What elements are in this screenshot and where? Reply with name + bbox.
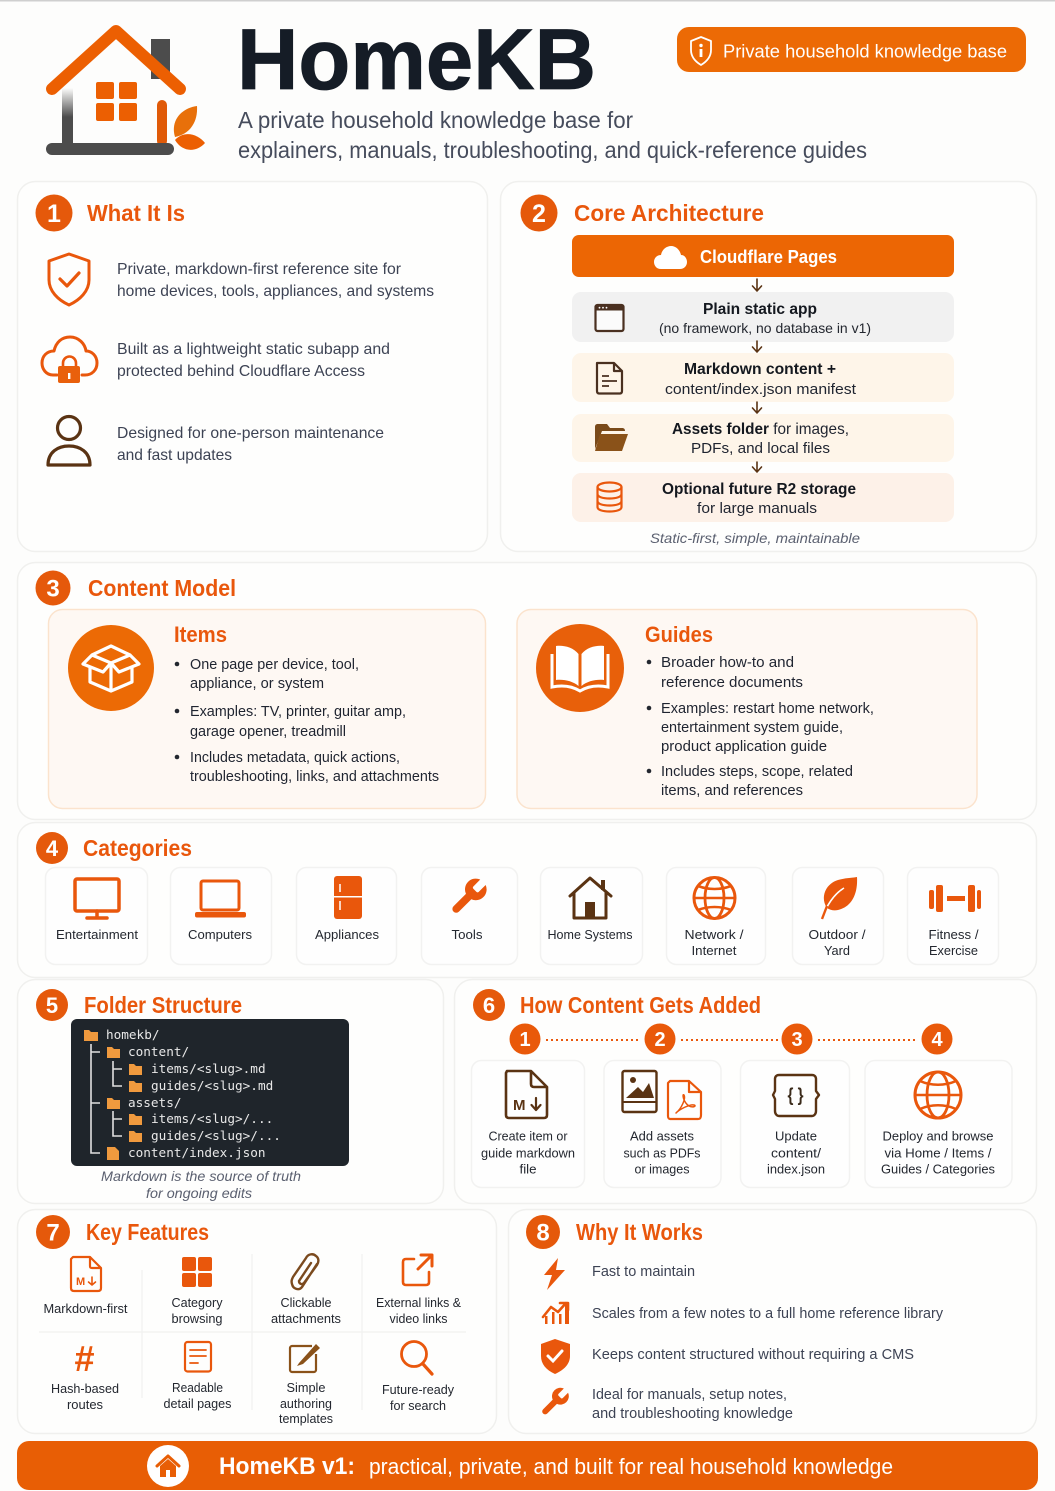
- feature: external links: External links &: [376, 1295, 461, 1310]
- list: items bullets: One page per device, tool,: [190, 656, 359, 673]
- timeline: step numbers: 4: [931, 1029, 943, 1051]
- category: entertainment: [46, 868, 148, 964]
- text: one-person maintenance: and fast updates: [117, 447, 232, 464]
- text: private reference site: home devices, tools, appliances, and systems: [117, 283, 434, 300]
- category: computers: Computers: [188, 927, 253, 942]
- code block: folder tree: items/<slug>/...: [151, 1111, 273, 1126]
- subtitle: [238, 107, 867, 163]
- panel: how content gets added: [454, 980, 1036, 1204]
- code block: folder tree: [71, 1019, 349, 1166]
- feature: simple authoring templates: [279, 1344, 333, 1426]
- panel: content model: [18, 562, 1036, 820]
- reason: fast to maintain: Fast to maintain: [592, 1263, 695, 1280]
- caption: Markdown is the source of truth: [101, 1168, 301, 1184]
- icon: book: [536, 624, 624, 712]
- layer: cloudflare pages: [572, 235, 954, 277]
- panel: what it is: 1: [47, 200, 61, 228]
- reason: fast to maintain: [544, 1258, 695, 1290]
- subtitle: explainers, manuals, troubleshooting, and quick-reference guides: [238, 137, 867, 163]
- step 3: update index json: { }: [788, 1085, 804, 1105]
- step 2: add assets: such as PDFs: [624, 1146, 701, 1160]
- step 2: add assets: [604, 1060, 721, 1188]
- footer banner: [17, 1441, 1038, 1490]
- icon: home: [147, 1445, 189, 1487]
- category: home systems: [540, 868, 642, 964]
- timeline: step numbers: [510, 1024, 952, 1054]
- list: guides bullets: reference documents: [661, 674, 803, 691]
- feature: clickable attachments: Clickable: [280, 1295, 332, 1310]
- list: guides bullets: Includes steps, scope, related: [661, 763, 853, 780]
- list: guides bullets: [647, 654, 874, 799]
- step 3: update index json: content/: [771, 1146, 821, 1160]
- step 4: deploy and browse: Guides / Categories: [881, 1162, 995, 1176]
- feature: future-ready search: for search: [390, 1398, 446, 1413]
- panel: key features: [18, 1210, 496, 1434]
- caption: Static-first, simple, maintainable: [650, 530, 860, 546]
- icon: box: [68, 625, 154, 711]
- icon: cloud lock: [42, 337, 97, 383]
- step 1: create markdown: Create item or: [488, 1128, 568, 1144]
- layer: markdown content: [572, 353, 954, 402]
- feature: hash-based routes: routes: [67, 1397, 103, 1412]
- step 1: create markdown: [472, 1060, 584, 1188]
- footer banner: practical, private, and built for real household knowledge: [369, 1454, 893, 1479]
- layer: markdown content: Markdown content +: [684, 361, 836, 378]
- text: built as subapp: Built as a lightweight static subapp and: [117, 341, 390, 358]
- feature: simple authoring templates: templates: [279, 1411, 333, 1426]
- logo: house icon: [46, 31, 205, 155]
- reason: structured without cms: [541, 1339, 914, 1374]
- layer: cloudflare pages: Cloudflare Pages: [700, 247, 837, 267]
- feature: future-ready search: [382, 1342, 454, 1413]
- panel: folder structure: Folder Structure: [84, 992, 242, 1018]
- layer: markdown content: content/index.json manifest: [665, 381, 857, 398]
- reason: structured without cms: Keeps content structured without requiring a CMS: [592, 1346, 914, 1363]
- feature: readable detail pages: Readable: [172, 1380, 223, 1395]
- list: items bullets: Examples: TV, printer, guitar amp,: [190, 703, 406, 720]
- layer: assets folder: Assets folder for images,: [672, 421, 849, 438]
- step 4: deploy and browse: Deploy and browse: [882, 1128, 994, 1144]
- code block: folder tree: assets/: [128, 1095, 181, 1110]
- list: guides bullets: product application guide: [661, 738, 827, 755]
- feature: hash-based routes: #: [74, 1338, 95, 1379]
- layer: plain static app: Plain static app: [703, 301, 817, 318]
- footer banner: HomeKB v1:: [219, 1453, 355, 1480]
- list: items bullets: Includes metadata, quick actions,: [190, 749, 400, 766]
- list: guides bullets: entertainment system guide,: [661, 719, 843, 736]
- list: items bullets: troubleshooting, links, and attachments: [190, 768, 439, 785]
- subtitle: A private household knowledge base for: [238, 107, 633, 133]
- caption: for ongoing edits: [146, 1185, 252, 1201]
- feature: category browsing: browsing: [172, 1311, 222, 1326]
- code block: folder tree: content/index.json: [128, 1145, 266, 1160]
- category: outdoor yard: Yard: [824, 943, 850, 958]
- code block: folder tree: content/: [128, 1044, 189, 1059]
- panel: categories: 4: [46, 836, 59, 861]
- reason: ideal for manuals: Ideal for manuals, setup notes,: [592, 1386, 787, 1403]
- panel: categories: Categories: [83, 835, 192, 861]
- arrow: [752, 279, 762, 291]
- panel: categories: [18, 822, 1036, 978]
- category: appliances: [296, 868, 396, 964]
- text: private reference site: [117, 261, 434, 300]
- feature: readable detail pages: detail pages: [164, 1396, 232, 1411]
- step 4: deploy and browse: via Home / Items /: [884, 1146, 992, 1160]
- category: appliances: Appliances: [315, 927, 379, 942]
- arrow: [752, 462, 762, 472]
- category: outdoor yard: [792, 868, 884, 964]
- step 1: create markdown: M: [513, 1097, 526, 1114]
- step 3: update index json: [740, 1060, 850, 1188]
- code block: folder tree: guides/<slug>/...: [151, 1128, 281, 1143]
- feature: markdown-first: M: [76, 1276, 85, 1288]
- panel: content model: Content Model: [88, 575, 236, 601]
- category: network internet: [666, 868, 766, 964]
- feature: hash-based routes: Hash-based: [51, 1381, 119, 1396]
- panel: folder structure: [18, 980, 444, 1204]
- reason: ideal for manuals: and troubleshooting knowledge: [592, 1405, 793, 1422]
- feature: external links: [376, 1255, 461, 1326]
- feature: category browsing: Category: [172, 1295, 223, 1310]
- badge: private household knowledge base: [677, 27, 1026, 72]
- category: fitness exercise: Fitness /: [928, 927, 979, 942]
- layer: assets folder: [572, 414, 954, 462]
- icon: shield check: [49, 254, 89, 305]
- feature: simple authoring templates: authoring: [280, 1396, 332, 1411]
- feature: clickable attachments: attachments: [271, 1311, 341, 1326]
- list: guides bullets: Broader how-to and: [661, 654, 794, 671]
- layer: optional r2 storage: for large manuals: [697, 500, 817, 517]
- code block: folder tree: items/<slug>.md: [151, 1061, 266, 1076]
- category: home systems: Home Systems: [548, 927, 633, 942]
- feature: external links: video links: [390, 1311, 448, 1326]
- step 2: add assets: or images: [634, 1162, 690, 1176]
- feature: simple authoring templates: Simple: [286, 1380, 326, 1395]
- reason: scales: [543, 1303, 943, 1324]
- timeline: step numbers: 1: [519, 1029, 531, 1051]
- panel: why it works: [508, 1210, 1036, 1434]
- timeline: step numbers: 2: [654, 1029, 666, 1051]
- text: built as subapp: [117, 341, 390, 380]
- step 3: update index json: index.json: [767, 1162, 825, 1176]
- step 4: deploy and browse: [865, 1060, 1012, 1188]
- code block: folder tree: homekb/: [106, 1027, 159, 1042]
- text: one-person maintenance: [117, 425, 384, 464]
- category: network internet: Network /: [684, 927, 744, 942]
- category: outdoor yard: Outdoor /: [808, 927, 866, 942]
- category: computers: [170, 868, 272, 964]
- list: guides bullets: items, and references: [661, 782, 803, 799]
- category: tools: Tools: [452, 927, 483, 942]
- list: items bullets: garage opener, treadmill: [190, 723, 346, 740]
- card: guides: Guides: [645, 622, 713, 647]
- card: guides: [517, 610, 977, 808]
- step 2: add assets: Add assets: [630, 1128, 694, 1144]
- list: items bullets: [175, 656, 439, 785]
- panel: why it works: Why It Works: [576, 1219, 703, 1245]
- list: items bullets: appliance, or system: [190, 675, 324, 692]
- list: guides bullets: Examples: restart home network,: [661, 700, 874, 717]
- card: items: [48, 610, 486, 808]
- layer: optional r2 storage: [572, 473, 954, 522]
- feature: category browsing: [172, 1257, 223, 1326]
- panel: why it works: 8: [536, 1220, 550, 1246]
- panel: what it is: [18, 182, 488, 552]
- step 1: create markdown: guide markdown: [481, 1146, 575, 1160]
- step 3: update index json: Update: [775, 1128, 817, 1144]
- category: tools: [422, 868, 518, 964]
- feature: markdown-first: Markdown-first: [44, 1301, 128, 1316]
- category: fitness exercise: [908, 868, 998, 964]
- arrow: [752, 402, 762, 413]
- panel: what it is: What It Is: [87, 200, 185, 226]
- title: HomeKB: [237, 12, 596, 108]
- feature: future-ready search: Future-ready: [382, 1382, 454, 1397]
- feature: markdown-first: [44, 1257, 128, 1316]
- feature: readable detail pages: [164, 1342, 232, 1411]
- category: fitness exercise: Exercise: [929, 943, 978, 958]
- reason: scales: Scales from a few notes to a full home reference library: [592, 1305, 943, 1322]
- card: items: Items: [174, 622, 227, 647]
- arrow: [752, 341, 762, 352]
- feature: hash-based routes: [51, 1338, 119, 1412]
- text: private reference site: Private, markdown-first reference site for: [117, 261, 402, 278]
- step 1: create markdown: file: [520, 1162, 536, 1176]
- badge: private household knowledge base: Private household knowledge base: [723, 40, 1007, 62]
- panel: key features: 7: [46, 1220, 60, 1246]
- category: network internet: Internet: [692, 943, 737, 958]
- layer: plain static app: [572, 292, 954, 342]
- panel: core architecture: 2: [532, 200, 546, 228]
- panel: content model: 3: [46, 576, 60, 602]
- category: entertainment: Entertainment: [56, 927, 138, 942]
- layer: optional r2 storage: Optional future R2 storage: [662, 481, 856, 498]
- icon: person: [48, 416, 90, 465]
- panel: core architecture: [500, 182, 1036, 552]
- panel: folder structure: 5: [46, 993, 58, 1018]
- reason: ideal for manuals: [542, 1386, 793, 1422]
- layer: plain static app: (no framework, no database in v1): [659, 320, 871, 336]
- caption: [101, 1168, 301, 1201]
- text: one-person maintenance: Designed for one-person maintenance: [117, 425, 384, 442]
- timeline: step numbers: 3: [791, 1029, 803, 1051]
- code block: folder tree: guides/<slug>.md: [151, 1078, 273, 1093]
- panel: key features: Key Features: [86, 1219, 209, 1245]
- panel: how content gets added: 6: [483, 993, 495, 1018]
- feature: clickable attachments: [271, 1254, 341, 1326]
- panel: core architecture: Core Architecture: [574, 200, 764, 226]
- panel: how content gets added: How Content Gets Added: [520, 992, 761, 1018]
- text: built as subapp: protected behind Cloudflare Access: [117, 363, 365, 380]
- layer: assets folder: PDFs, and local files: [691, 440, 830, 457]
